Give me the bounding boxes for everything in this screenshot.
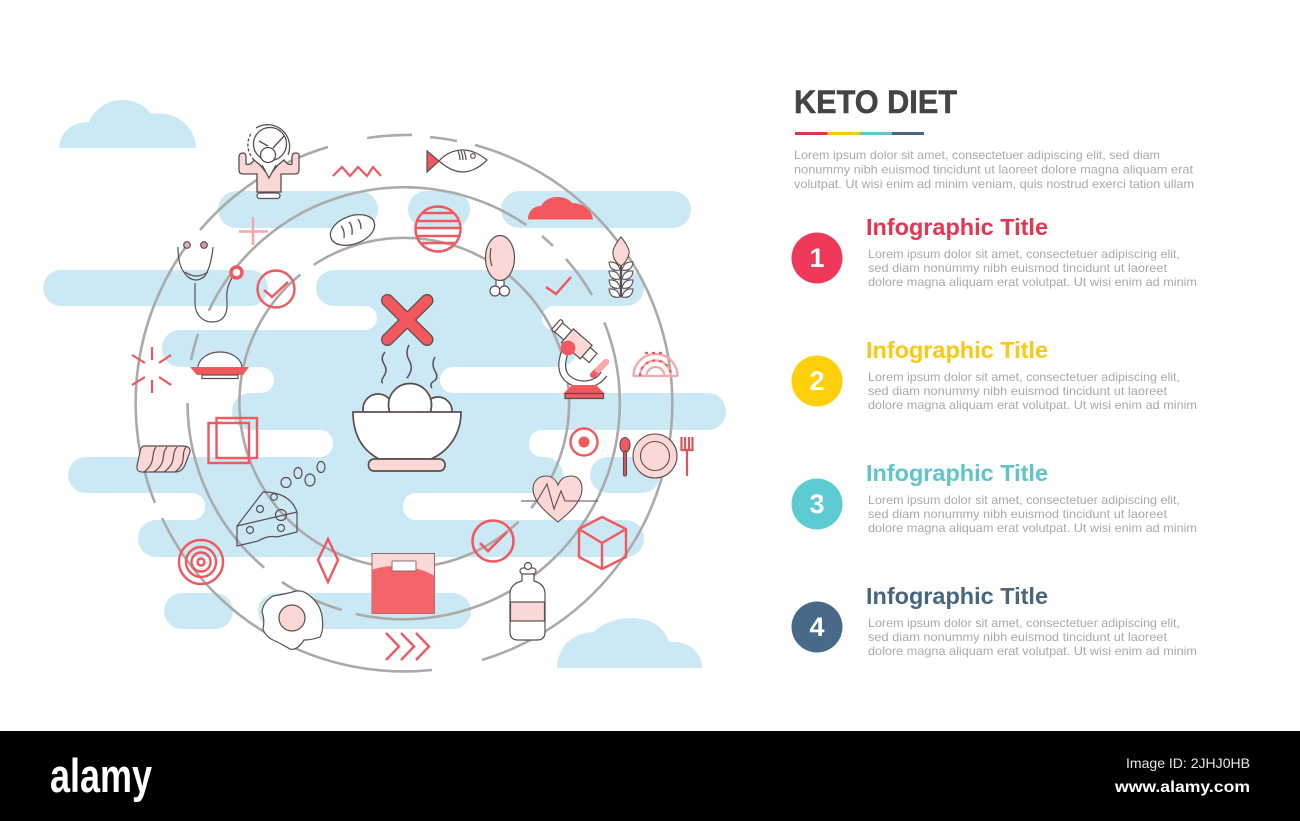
icon: check circle bottom — [472, 520, 514, 562]
icon: fried egg — [262, 591, 323, 649]
item 1: Infographic Title — [866, 214, 1048, 240]
icon: big X — [388, 300, 427, 340]
icon: food dome — [190, 352, 249, 378]
icon: wheat — [609, 237, 633, 297]
icon: microscope — [549, 318, 606, 398]
footer bar: Image ID: 2JHJ0HB — [1126, 755, 1250, 771]
icon: overlapping squares — [208, 418, 257, 463]
item 1: 1 — [809, 243, 825, 273]
title: KETO DIET — [794, 84, 957, 120]
icon: striped circle — [415, 206, 461, 252]
icon: chevrons — [386, 633, 429, 660]
icon: starburst — [132, 347, 171, 393]
item 2: Infographic Title — [866, 337, 1048, 363]
icon: red cloud — [528, 197, 593, 220]
icon: target rings — [179, 540, 223, 584]
icon: bread — [326, 209, 379, 251]
item 3 — [792, 460, 1197, 535]
icon: cube — [579, 517, 626, 569]
intro paragraph — [794, 148, 1194, 191]
item 3: sed diam nonummy nibh euismod tincidunt ut laoreet — [868, 507, 1168, 521]
concentric dashed rings — [136, 135, 672, 671]
item 3: Lorem ipsum dolor sit amet, consectetuer adipiscing elit, — [868, 493, 1180, 507]
icon: zigzag — [333, 167, 381, 176]
icon: plate with spoon and fork — [620, 434, 692, 478]
item 2 — [792, 337, 1197, 412]
icon: stethoscope — [178, 242, 242, 322]
item 2: dolore magna aliquam erat volutpat. Ut wisi enim ad minim — [868, 398, 1197, 412]
item 1 — [792, 214, 1197, 289]
intro paragraph: Lorem ipsum dolor sit amet, consectetuer adipiscing elit, sed diam — [794, 148, 1160, 162]
icon: bacon — [137, 446, 190, 472]
item 1: dolore magna aliquam erat volutpat. Ut wisi enim ad minim — [868, 275, 1197, 289]
footer bar: www.alamy.com — [1114, 779, 1250, 796]
icon: pink plus — [239, 217, 268, 245]
item 1: sed diam nonummy nibh euismod tincidunt ut laoreet — [868, 261, 1168, 275]
icon: diamond — [318, 539, 338, 582]
title underline — [795, 132, 924, 135]
icon: bottle — [510, 562, 545, 640]
icon: bowl of food — [353, 384, 461, 471]
item 2: sed diam nonummy nibh euismod tincidunt ut laoreet — [868, 384, 1168, 398]
icon: steam — [382, 345, 437, 388]
icon: chicken drumstick — [486, 236, 514, 296]
icon: fish — [427, 150, 487, 172]
item 2: 2 — [809, 366, 825, 396]
item 4: Lorem ipsum dolor sit amet, consectetuer adipiscing elit, — [868, 616, 1180, 630]
footer bar — [0, 731, 1300, 821]
icon: cheese — [237, 462, 325, 546]
item 4 — [792, 583, 1197, 658]
icon: flexing person with wheel — [239, 125, 299, 198]
icon: target dot — [570, 428, 598, 456]
icon: weight scale — [372, 554, 434, 614]
item 3: 3 — [809, 489, 825, 519]
item 1: Lorem ipsum dolor sit amet, consectetuer adipiscing elit, — [868, 247, 1180, 261]
icon: small check — [546, 277, 571, 294]
icon: rainbow arch — [633, 353, 678, 376]
item 4: sed diam nonummy nibh euismod tincidunt ut laoreet — [868, 630, 1168, 644]
item 4: Infographic Title — [866, 583, 1048, 609]
footer bar: alamy — [50, 749, 152, 802]
icon: heart with pulse — [521, 476, 598, 522]
item 3: Infographic Title — [866, 460, 1048, 486]
intro paragraph: nonummy nibh euismod tincidunt ut laoreet dolore magna aliquam erat — [794, 162, 1194, 176]
item 3: dolore magna aliquam erat volutpat. Ut wisi enim ad minim — [868, 521, 1197, 535]
item 4: 4 — [809, 612, 825, 642]
icon: check circle left — [258, 270, 294, 308]
background clouds and bands — [43, 100, 729, 668]
item 4: dolore magna aliquam erat volutpat. Ut wisi enim ad minim — [868, 644, 1197, 658]
intro paragraph: volutpat. Ut wisi enim ad minim veniam, quis nostrud exerci tation ullam — [794, 177, 1194, 191]
item 2: Lorem ipsum dolor sit amet, consectetuer adipiscing elit, — [868, 370, 1180, 384]
